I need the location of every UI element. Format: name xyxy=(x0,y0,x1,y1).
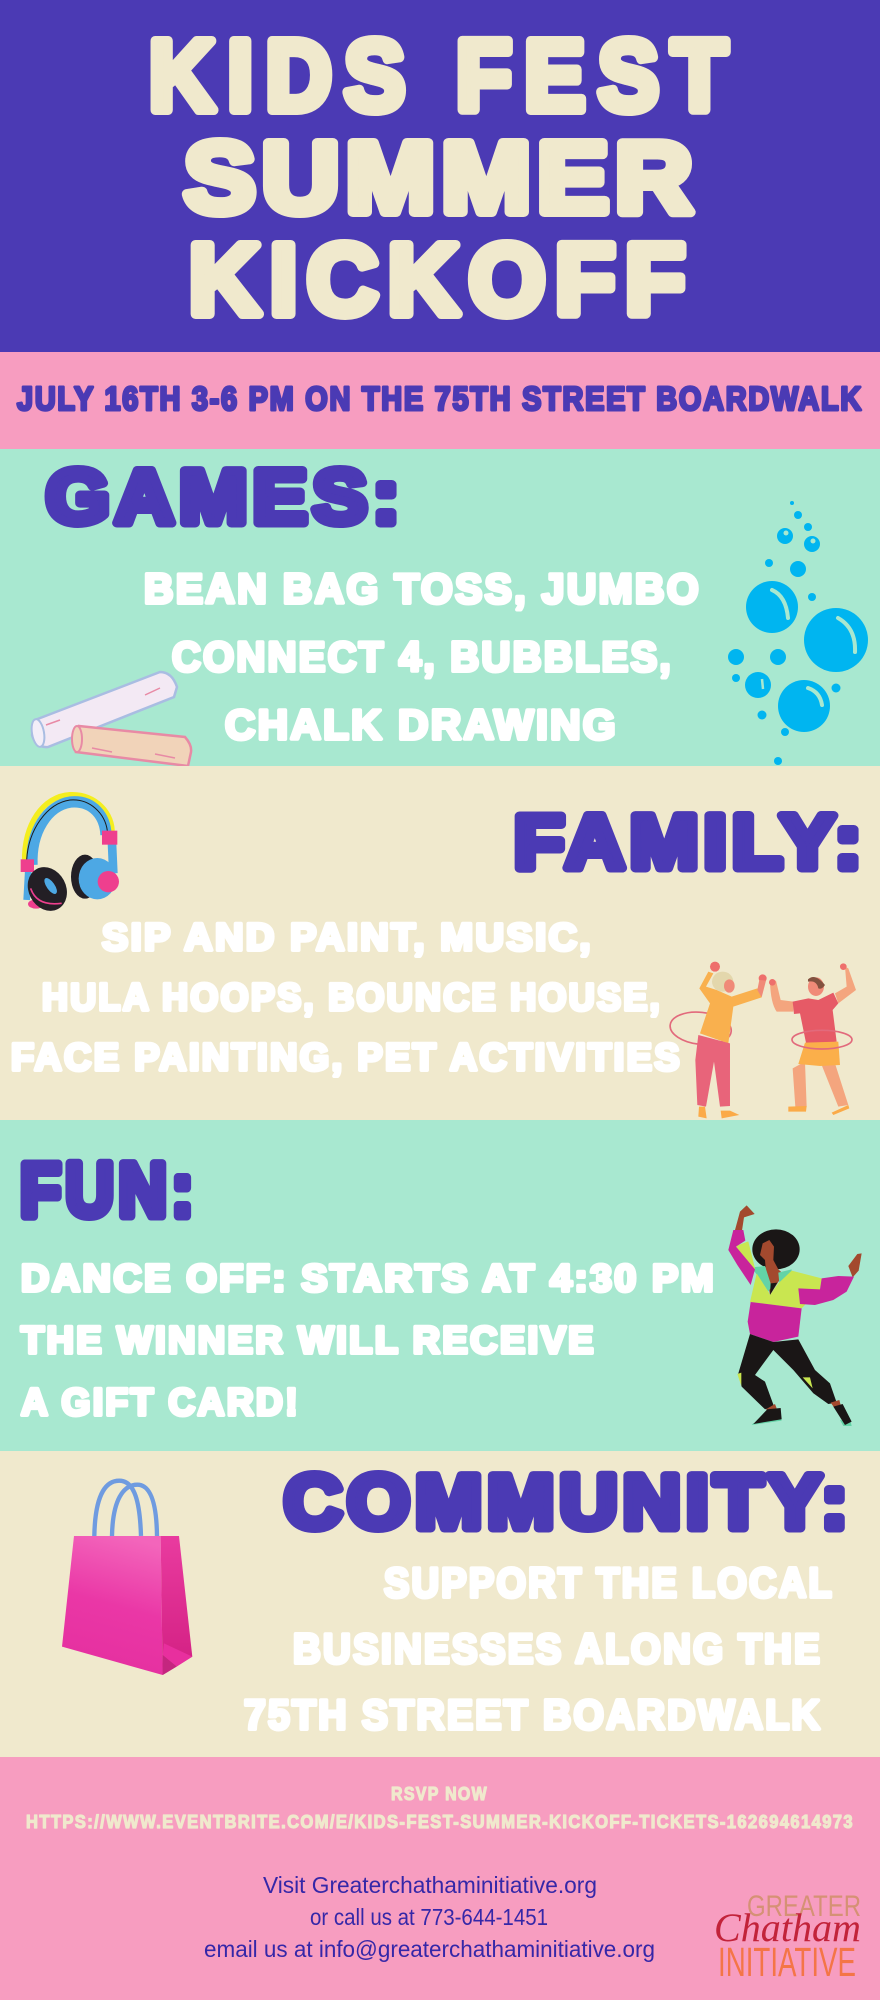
community text: BUSINESSES ALONG THE xyxy=(293,1625,822,1672)
contact details: Visit Greaterchathaminitiative.org xyxy=(263,1872,597,1898)
panel: footer xyxy=(0,1757,880,2000)
community text: 75TH STREET BOARDWALK xyxy=(244,1691,822,1738)
panel: fun xyxy=(0,1120,880,1451)
icon: chalk sticks xyxy=(30,672,191,766)
fun activities text: DANCE OFF: STARTS AT 4:30 PM xyxy=(21,1258,716,1300)
contact details: email us at info@greaterchathaminitiative.org xyxy=(204,1936,655,1962)
contact details: or call us at 773-644-1451 xyxy=(310,1904,548,1930)
family activities text: HULA HOOPS, BOUNCE HOUSE, xyxy=(42,977,662,1019)
panel: family xyxy=(0,766,880,1120)
panel: title banner xyxy=(0,0,880,352)
community text: SUPPORT THE LOCAL xyxy=(384,1559,834,1606)
heading: fun: FUN: xyxy=(20,1148,198,1233)
logo: Greater Chatham Initiative xyxy=(714,1890,861,1985)
heading: community: COMMUNITY: xyxy=(284,1460,853,1545)
icon: headphones xyxy=(20,795,119,918)
title line: KICKOFF: KICKOFF xyxy=(189,224,695,336)
icon: bubbles xyxy=(728,501,868,765)
contact details xyxy=(204,1872,655,1962)
family activities text xyxy=(11,917,682,1079)
rsvp label: RSVP NOW xyxy=(391,1784,488,1804)
illustration: two people hula hooping xyxy=(668,962,856,1118)
games activities text: CONNECT 4, BUBBLES, xyxy=(172,633,673,680)
games activities text: BEAN BAG TOSS, JUMBO xyxy=(144,565,701,612)
heading: family: FAMILY: xyxy=(514,800,867,885)
panel: date and location xyxy=(0,352,880,449)
fun activities text: THE WINNER WILL RECEIVE xyxy=(21,1320,596,1362)
family activities text: FACE PAINTING, PET ACTIVITIES xyxy=(11,1037,682,1079)
fun activities text: A GIFT CARD! xyxy=(21,1382,300,1424)
title line: KIDS FEST: KIDS FEST xyxy=(149,20,740,132)
icon: shopping bag xyxy=(62,1481,192,1675)
heading: games: GAMES: xyxy=(46,455,405,540)
games activities text: CHALK DRAWING xyxy=(225,701,618,748)
games activities text xyxy=(144,565,701,748)
fun activities text xyxy=(21,1258,716,1424)
community text xyxy=(244,1559,834,1738)
logo: Greater Chatham Initiative: Chatham xyxy=(714,1905,861,1950)
title line: SUMMER: SUMMER xyxy=(184,122,699,234)
panel: games xyxy=(0,449,880,766)
family activities text: SIP AND PAINT, MUSIC, xyxy=(102,917,593,959)
panel: community xyxy=(0,1451,880,1757)
illustration: dancer xyxy=(728,1205,862,1426)
